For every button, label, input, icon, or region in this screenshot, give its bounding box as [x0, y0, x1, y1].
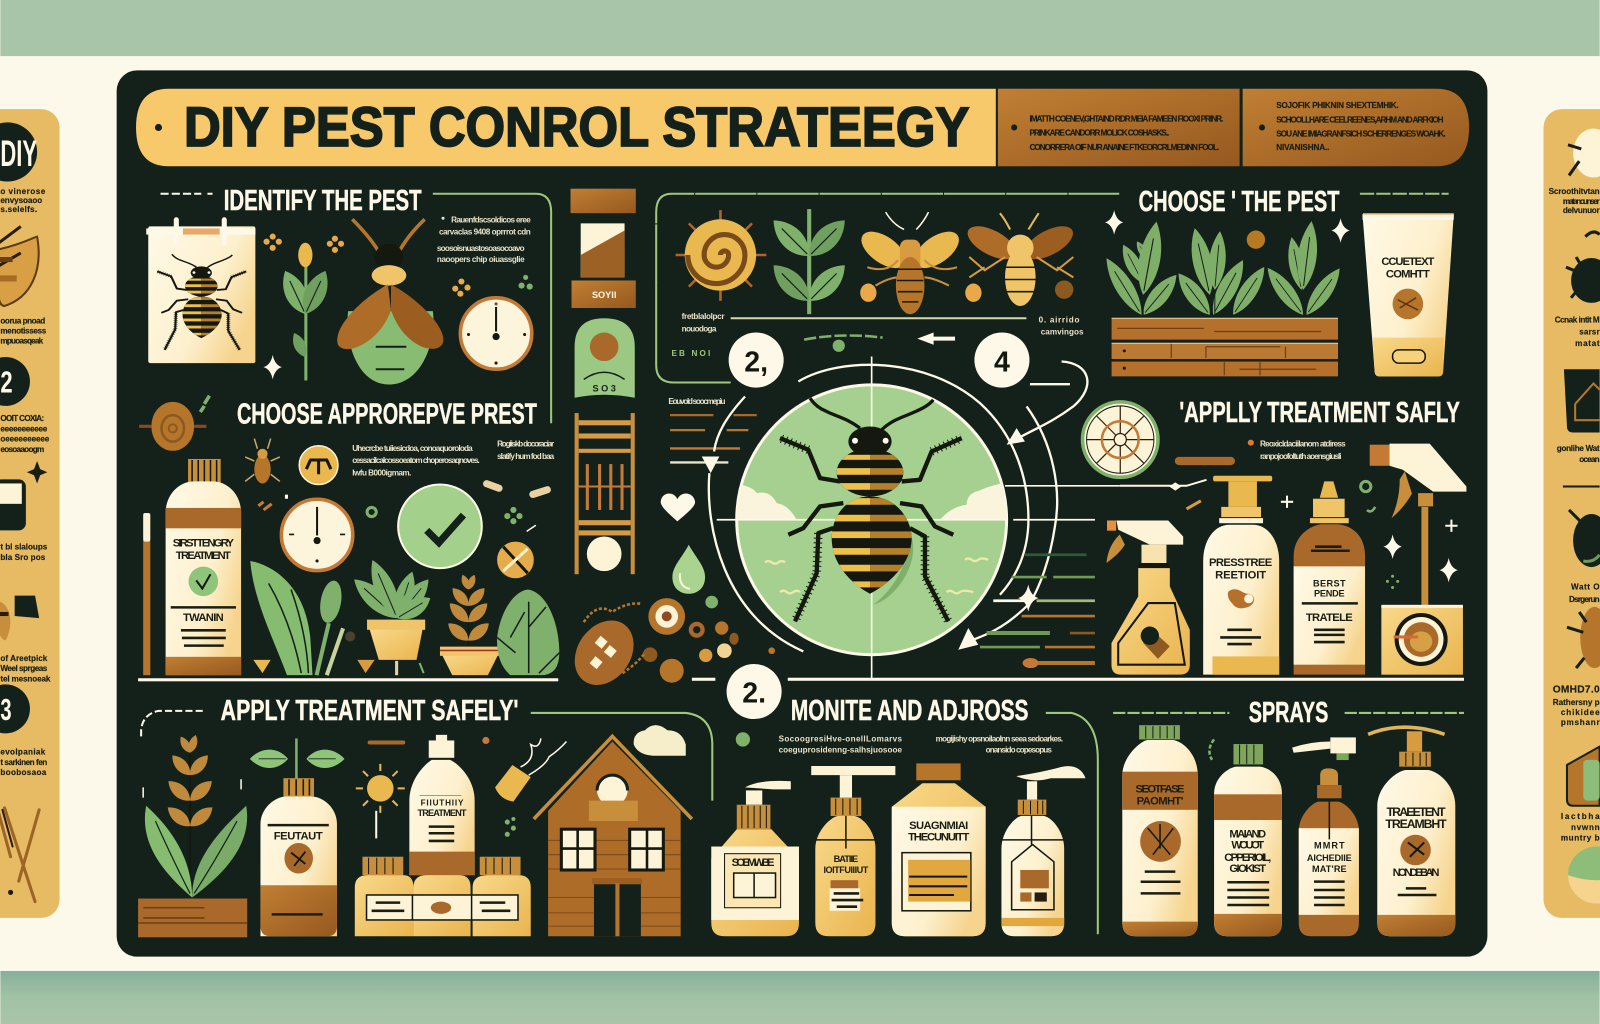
text blocks: Rogiiskb docoraciar: [497, 440, 555, 449]
badge: 2 bottom centre: 2.: [742, 678, 766, 710]
right strip text 6: muntry b: [1561, 833, 1600, 842]
icon: cloud: [634, 725, 686, 756]
heart icon: [661, 494, 695, 521]
small green ring: [367, 507, 376, 517]
line arrow tip: [1169, 482, 1181, 491]
icon: brown and cream bottle: [1294, 481, 1365, 675]
icon: brown fern: [440, 573, 500, 675]
text block: Rauenfdscsoldicos eree: [451, 215, 531, 224]
icon: bottle 1: SEOTFASE: [1136, 783, 1185, 795]
icon: brown and cream bottle: PENDE: [1314, 589, 1345, 599]
icon: sparkle: [264, 355, 282, 379]
icon: labelled box: SOYII: [592, 290, 616, 300]
text: left caption: [671, 312, 725, 358]
chain lines: [584, 603, 645, 673]
icon: bottle 3 with nozzle: [1292, 737, 1359, 936]
panel: main dark board: [117, 70, 1487, 957]
text: left caption: EB NOI: [671, 349, 710, 358]
right strip text 5: [1553, 685, 1600, 727]
right strip text 4: Watt O: [1571, 583, 1600, 592]
icon: tall bottle and jars: TREATMENT: [418, 808, 467, 818]
heading: 'APPLLY TREATMENT SAFLY: [1179, 397, 1460, 429]
banner block 1: PRINKARE CANDORR MOLICK COSHASKS..: [1029, 129, 1169, 138]
icon: treatment bottle: SIRSTTENGRY: [173, 538, 234, 550]
caption rules right: [980, 555, 1095, 668]
icon: brown and cream bottle: BERST: [1313, 578, 1346, 588]
icon: bottle 2: GIOKIST: [1229, 863, 1266, 875]
guide lines: [709, 356, 1120, 678]
icon: brown winged insect: [963, 213, 1078, 306]
icon: wheel: [1083, 402, 1158, 477]
icon: bottle 3 with nozzle: MMRT: [1314, 841, 1345, 851]
left strip text 5: [0, 654, 51, 683]
text: left caption: fretblalolpcr: [682, 312, 725, 321]
heading: CHOOSE APPRORЕPVE PREST: [237, 398, 537, 430]
icon: brown and cream bottle: TRATELE: [1306, 612, 1353, 624]
pills: [482, 479, 552, 499]
section: choose the pest: [1099, 186, 1454, 376]
icon: bottle 4 pump: NONDEBAIN: [1393, 867, 1439, 879]
icon: bottle 2: WOUOT: [1231, 840, 1264, 852]
icon: check circle: [398, 484, 482, 568]
left strip text 6: evolpaniak: [0, 748, 46, 757]
badge: DIY: DIY: [0, 133, 37, 174]
icon: bottle 4 pump: TREAMBHT: [1385, 817, 1447, 831]
left strip text 5: Weel sprgeas: [0, 664, 48, 673]
left strip text 2: oorua pnoad: [0, 316, 45, 325]
shelf line: [788, 678, 1464, 681]
icon: FEUTAUT bottle: [260, 778, 337, 936]
icon: flower stem: [276, 243, 335, 380]
icon: dark house box: [1564, 369, 1600, 432]
left strip text 4: [0, 543, 48, 562]
right strip text 2: matat: [1575, 339, 1600, 348]
icon: brown box: [571, 189, 636, 213]
icon: cream pump bottle: [1203, 476, 1279, 675]
text block: SocoogresiHve-onellLomarvs: [779, 734, 902, 743]
right strip text 5: Rathersny p: [1553, 698, 1600, 707]
decorative dots: [264, 234, 533, 297]
icon: ladder: [575, 413, 635, 574]
icon: bottle 1: [1122, 725, 1198, 936]
icon: treatment bottle: [166, 459, 241, 675]
right strip text 2: Ccnak intit M: [1555, 315, 1600, 324]
icon: bottle 3 with nozzle: AICHEDIIE: [1307, 853, 1352, 863]
icon: large bottle: THECUNUITT: [908, 831, 969, 843]
section: apply treatment safely: [138, 695, 712, 937]
icon: potted plant: [348, 556, 435, 675]
left strip text 3: OOIT COXIA:: [0, 414, 44, 423]
small green marker: [804, 335, 883, 352]
text block: [779, 734, 1063, 755]
main circle: [737, 385, 1007, 655]
decorative discs: [860, 280, 1073, 302]
banner block 2: SCHOOLLHARE CEELREENES,ARHM AND ARFKIOH: [1276, 115, 1444, 124]
left strip text 1: envysoaoo: [0, 196, 42, 205]
icon: cream bug: [1568, 129, 1600, 177]
section: sprays: [1113, 697, 1464, 936]
icon: mark: [1585, 232, 1600, 237]
right strip text 6: nvwnn: [1571, 823, 1600, 832]
icon: cream tube: CCUETEXT: [1381, 256, 1435, 268]
icon: cream pump bottle: PRESSTREE: [1209, 557, 1273, 569]
icon: clock: [460, 298, 532, 369]
banner block 2: NIVANISHNA..: [1276, 143, 1329, 152]
brown bar: [1175, 457, 1235, 465]
right strip text 1: delvunuor: [1563, 206, 1600, 215]
title bar: [136, 89, 1469, 166]
badge: 2: [0, 357, 30, 406]
icon: small bug: [245, 439, 280, 483]
text block: [437, 215, 531, 264]
main bug: [780, 398, 962, 621]
icon: bottle 2: CPPERIOIL,: [1224, 852, 1271, 864]
text: right caption: 0. airrido: [1039, 315, 1079, 324]
icon: tall bottle and jars: FIIUTHIIY: [421, 799, 464, 808]
icon: cream and brown block: [581, 223, 625, 277]
right strip text 1: Scroothitvtan: [1549, 187, 1600, 196]
icon: large bottle: SUAGNMIAI: [909, 820, 968, 832]
text: right caption: [1039, 315, 1084, 337]
icon: pump bottle: [711, 781, 799, 936]
squiggles: [765, 558, 988, 593]
text block: onansido copesopus: [986, 746, 1052, 755]
green dots: [504, 507, 523, 524]
icon: wooden box: [1567, 747, 1600, 806]
green dot: [736, 732, 750, 747]
icon: pump bottle: SOEMWBE: [732, 857, 775, 869]
right strip text 2: sarsr: [1579, 328, 1600, 337]
icon: bottle 4 pump: TRAEETENT: [1386, 805, 1446, 819]
text blocks: slatify hum fod baa: [497, 452, 555, 461]
left strip text 6: boobosaoa: [0, 768, 47, 777]
left strip text 5: tel mesnoeak: [0, 674, 51, 683]
sparkles: [1105, 210, 1350, 243]
right strip text 3: ocean: [1579, 455, 1600, 464]
banner block 1: IMATTH COENEV,GHTAIND RDR MEIA FAMEEN FIOOXI PRINR.: [1029, 114, 1223, 123]
icon: tall pump bottle: BATIIE: [834, 854, 858, 864]
icon: large bottle: [892, 763, 986, 936]
icon: star: [27, 461, 47, 483]
badge: 3: [0, 684, 30, 733]
text block: carvaclas 9408 oprrrot cdn: [439, 228, 531, 237]
divider: caption line: [731, 317, 1026, 319]
icon: big leaf plant: [250, 561, 355, 675]
banner block 2: SOU ANE IMIAGRANFSICH SCHERRENGES WOAHK.: [1276, 130, 1446, 139]
arrow: small left: [917, 332, 955, 345]
icon: crossed sticks: [0, 808, 39, 902]
panel: right side strip: [1544, 109, 1600, 918]
central bug diagram: [643, 356, 1207, 683]
text block: naoopers chip oiuassglie: [437, 255, 525, 264]
cluster: bottom centre trinkets: [563, 603, 646, 696]
icon: gold spray bottle: [1106, 520, 1190, 675]
right strip text 6: [1561, 812, 1600, 842]
text blocks: Uhecrcbe tuiiesicdoa, conoaquoroloda: [352, 444, 473, 453]
mark: [1209, 739, 1214, 760]
right strip text 5: OMHD7.0: [1553, 685, 1600, 696]
section: choose appropriate: [138, 396, 559, 681]
icon: top right spray: [1370, 444, 1466, 606]
badge: 2: 2,: [744, 346, 768, 378]
left strip text 1: [0, 187, 46, 214]
icon: leaf sprig: [250, 738, 345, 779]
icon: large brown beetle: [337, 219, 443, 385]
icon: wooden planter: [1112, 318, 1338, 376]
right strip text 2: [1555, 315, 1600, 348]
text block: coeguprosidenng-salhsjuosooe: [779, 746, 902, 755]
icon: crossed badge: [497, 542, 534, 578]
text block: [1248, 440, 1346, 461]
text: right caption: camvingos: [1041, 328, 1084, 337]
icon: bottle 4 pump: [1368, 727, 1455, 936]
icon: bottle 2: MAIAND: [1229, 828, 1266, 840]
heading: IDENTIFY THE PEST: [224, 185, 422, 217]
sparkles and marks: [1187, 481, 1458, 589]
icon: gold badge: [299, 446, 338, 484]
heading: APPLY TREATMENT SAFELY': [221, 695, 519, 727]
icon: bottle 2: [1214, 744, 1282, 936]
text: left caption: nouodoga: [682, 324, 717, 333]
icon: plug: [495, 738, 566, 802]
icon: tall bottle and jars: [355, 735, 531, 936]
badge: 4: [974, 332, 1029, 388]
icon: FEUTAUT bottle: FEUTAUT: [274, 830, 323, 842]
left strip text 3: [0, 414, 50, 454]
bug shadow: [873, 536, 913, 605]
left strip text 6: [0, 748, 47, 777]
icon: yellow winged insect: [855, 212, 965, 314]
icon: brown bug: [1567, 607, 1600, 668]
icon: cream pump bottle: REETIOIT: [1215, 569, 1266, 581]
right strip text 3: [1557, 444, 1600, 464]
icon: bowl: [0, 226, 39, 306]
icon: dark bug: [1569, 510, 1600, 567]
left strip text 1: o vinerose: [0, 187, 46, 196]
text blocks: Iwfu B000igmam.: [352, 468, 411, 477]
small cones: [253, 660, 375, 673]
banner block 1: CONORRERA OIF NUR ANAINE FTKEORCRLMEDINN FOOL.: [1029, 143, 1219, 152]
left strip text 1: s.selelfs.: [0, 205, 37, 214]
left strip text 5: of Areetpick: [0, 654, 48, 663]
icon: bee: [0, 596, 39, 641]
icon: brown pod: [563, 609, 646, 696]
text blocks: [352, 440, 555, 477]
text block: Reoxicldaciilanom atdiress: [1260, 440, 1346, 449]
icon: clock: [281, 499, 353, 571]
badge: 3: 3: [0, 693, 12, 727]
icon: green capsule: [575, 318, 635, 398]
icon: no-sign box: [1381, 605, 1463, 675]
middle column icons: [571, 189, 636, 574]
icon: tall pump bottle: IOITFUIIIUT: [823, 865, 869, 875]
bottom green band: [0, 971, 1600, 1024]
icon: gold seed: [1247, 231, 1265, 249]
badge: 2: 2: [0, 366, 13, 400]
icon: labelled box: [572, 280, 636, 308]
icon: black bug: [1566, 257, 1600, 303]
icon: green capsule: S O 3: [592, 384, 616, 394]
left strip text 2: [0, 316, 47, 346]
badge: DIY: [0, 122, 37, 182]
banner block 2: SOJOFIK PHIKNIN SHEXTEMHIK.: [1276, 101, 1399, 110]
right strip text 5: chikidee: [1561, 708, 1600, 717]
caption rules left: [670, 415, 757, 462]
clouds: [733, 481, 1010, 520]
icon: green circle: [1568, 847, 1600, 904]
right strip text 1: [1549, 187, 1600, 215]
right strip text 1: matancunser: [1563, 197, 1600, 206]
small marks: [258, 495, 536, 531]
rule: [1563, 485, 1600, 488]
right strip text 5: pmshanr: [1561, 718, 1600, 727]
left strip text 3: oeeeeeeeeee: [0, 435, 50, 444]
icon: treatment bottle: TWANIN: [183, 612, 224, 624]
right strip text 6: lactbha: [1561, 812, 1600, 821]
icon: plant: [766, 209, 853, 314]
line to spray: [1120, 480, 1207, 486]
panel: left side strip: [0, 109, 60, 918]
icon: cream tube: COMHTT: [1386, 268, 1430, 280]
badge: 2 bottom centre: [727, 664, 782, 719]
section: identify the pest: [146, 185, 551, 423]
beads: [643, 596, 775, 683]
section: top centre icons: [656, 194, 1119, 388]
left caption lines: Eouvold soocmepiu: [668, 397, 726, 406]
heading: SPRAYS: [1249, 697, 1328, 729]
section: monitor and adjust: [711, 695, 1098, 936]
icon: house: [534, 736, 692, 936]
right strip text 4: Dsrgerun: [1569, 595, 1600, 604]
icon: wheat and leaf planter: [138, 734, 247, 937]
icon: treatment bottle: TREATMENT: [176, 550, 231, 562]
section: apply treatment right: [692, 397, 1466, 681]
icon: bottle 3 with nozzle: MAT'RE: [1312, 864, 1347, 874]
dash: [692, 678, 715, 681]
marks: [143, 737, 516, 838]
badge: 4: 4: [994, 346, 1010, 378]
icon: cream tube: [1362, 213, 1454, 376]
arrowheads: [702, 428, 1038, 650]
left strip text 2: mpuoasqeak: [0, 337, 44, 346]
heading: CHOOSE ' THE PEST: [1139, 186, 1340, 218]
right strip text 4: [1569, 583, 1600, 604]
right strip text 3: gonlihe Wat: [1557, 444, 1600, 453]
text block: mogijishy opsnoilaoInn seea sedoarkes.: [936, 734, 1063, 743]
icon: pinned note with bug: [146, 217, 255, 363]
water drop icon: [672, 545, 705, 594]
text block: soosoisnuastosoasocoavo: [437, 244, 525, 253]
icon: tagged bottle: [1001, 766, 1086, 936]
left strip text 2: menotissess: [0, 327, 47, 336]
heading: title: DIY PEST CONROL STRATEEGY: [184, 95, 969, 158]
banner block 1: [998, 89, 1240, 166]
left strip text 3: eosoaaoogm: [0, 445, 44, 454]
text block: ranpojoofoltuth aoensgiusli: [1260, 452, 1342, 461]
icon: stick: [143, 513, 150, 675]
icon: round leaf: [497, 590, 559, 675]
badge: 2: [729, 332, 784, 388]
top green band: [0, 0, 1600, 56]
icon: sun: [356, 764, 405, 813]
shelf line: [138, 678, 558, 681]
icon: plants: [1099, 220, 1346, 320]
left strip text 4: t bl slaloups: [0, 543, 48, 552]
text blocks: cessacilcalcossoeatom choperosaqnoves.: [352, 456, 480, 465]
icon: snail: [139, 396, 209, 451]
left strip text 3: eeeeeeeeeee: [0, 424, 48, 433]
icon: dark box: [0, 479, 26, 530]
icon: target disc: [648, 598, 685, 635]
icon: bottle 1: PAOMHT': [1137, 796, 1184, 808]
banner block 2: [1243, 89, 1469, 166]
left strip text 4: bla Sro pos: [0, 553, 46, 562]
left strip text 6: t sarkinen fen: [0, 758, 47, 767]
heading: MONITE AND ADJROSS: [791, 695, 1028, 727]
icon: tall pump bottle: [811, 766, 895, 936]
icon: spiral sun: [676, 210, 766, 301]
